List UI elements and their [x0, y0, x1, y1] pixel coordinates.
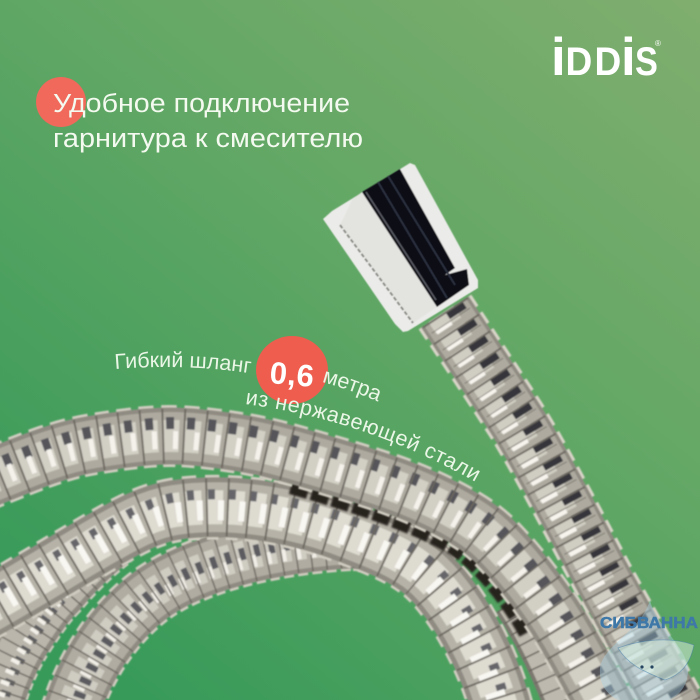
curved caption: flexible hose length: Гибкий шланг: [116, 351, 252, 373]
watermark: СИБВАННА drop mascot: [600, 600, 698, 700]
logo: iDDiS: ®: [655, 39, 661, 48]
heading: convenient connection: [53, 90, 363, 153]
red circle behind hose length: [256, 336, 328, 404]
contact shadow under top coil: [297, 466, 545, 623]
chrome connector: [323, 163, 478, 332]
watermark: СИБВАННА drop mascot: СИБВАННА: [600, 615, 698, 632]
logo: iDDiS: [551, 28, 661, 87]
hose strand: top coil: [0, 423, 619, 700]
logo: iDDiS: i: [551, 28, 566, 87]
hose strand: second coil: [0, 494, 505, 700]
heading: convenient connection: гарнитура к смесителю: [53, 125, 363, 153]
curved caption: flexible hose length: из нержавеющей стали: [246, 393, 480, 482]
curved caption: flexible hose length: метра: [323, 371, 380, 402]
hose strand: lower coil: [65, 537, 434, 700]
hose strand: from connector: [437, 307, 694, 700]
logo: iDDiS: i: [621, 28, 636, 87]
logo: iDDiS: D: [594, 40, 621, 84]
hose strand: right inner coil: [515, 600, 575, 700]
heading: convenient connection: Удобное подключение: [53, 90, 350, 118]
logo: iDDiS: D: [566, 40, 592, 84]
logo: iDDiS: S: [635, 38, 658, 84]
red circle accent behind heading: [36, 77, 86, 127]
hose strand: far left coil: [0, 540, 119, 700]
curved caption: flexible hose length: [116, 351, 480, 482]
curved caption: flexible hose length: 0,6: [268, 355, 316, 394]
